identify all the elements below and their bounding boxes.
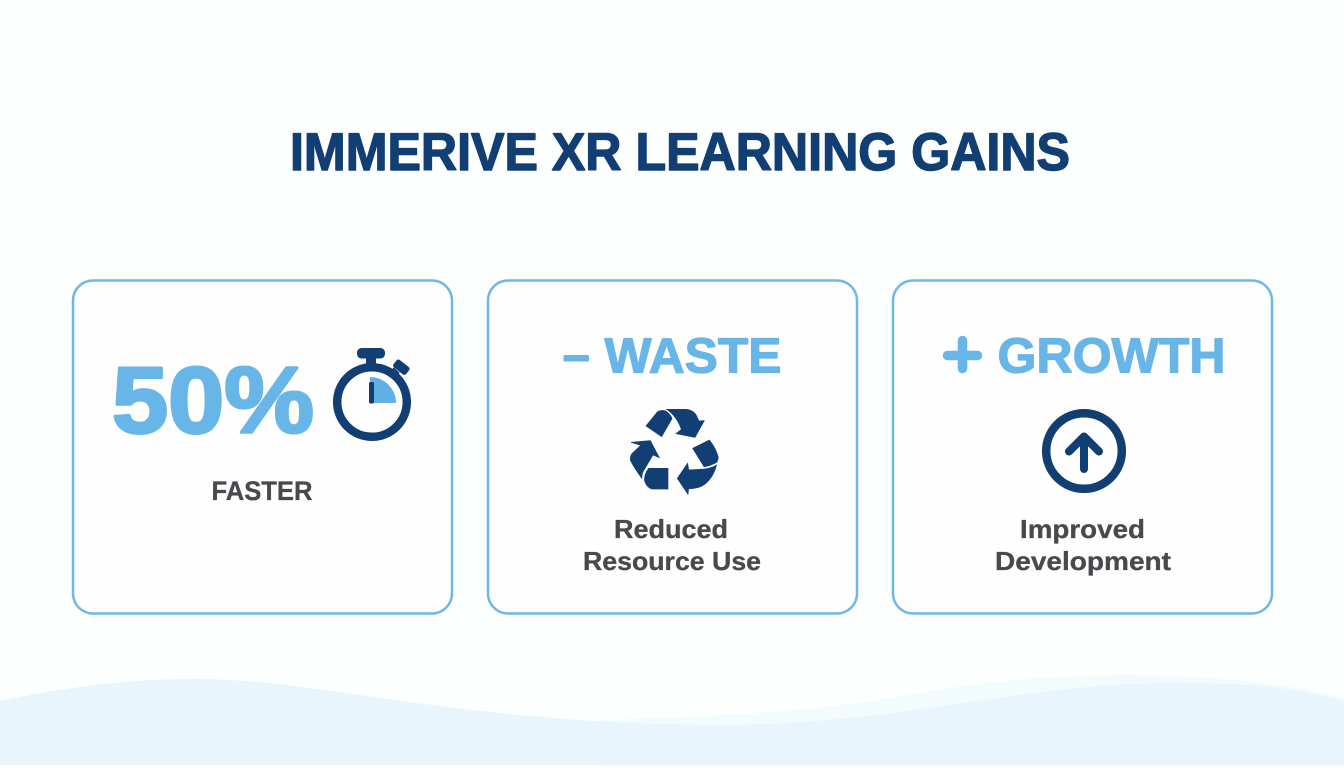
- label: reduced resource use: [583, 514, 761, 576]
- background wave: front layer: [0, 679, 1344, 765]
- panel border: waste: [488, 280, 857, 614]
- panel: waste: [488, 280, 857, 614]
- title: IMMERIVE XR LEARNING GAINS: [290, 123, 1070, 182]
- panel border: faster: [73, 280, 452, 614]
- heading: minus waste: WASTE: [604, 328, 782, 384]
- panel border: growth: [893, 280, 1272, 614]
- icon: stopwatch: [337, 348, 411, 437]
- icon: up arrow in circle: [1046, 413, 1122, 489]
- background wave: rear layer: [600, 675, 1344, 766]
- label: reduced resource use: Reduced: [614, 514, 728, 544]
- panel: 50% faster: [73, 280, 452, 614]
- label: faster: FASTER: [212, 476, 312, 506]
- label: improved development: [995, 514, 1171, 576]
- label: improved development: Improved: [1020, 514, 1145, 544]
- icon: recycle: [630, 409, 718, 494]
- heading: plus growth: GROWTH: [998, 328, 1226, 384]
- label: reduced resource use: Resource Use: [583, 546, 761, 576]
- statistic: 50%: 50%: [112, 348, 314, 452]
- panel: growth: [893, 280, 1272, 614]
- label: improved development: Development: [995, 546, 1171, 576]
